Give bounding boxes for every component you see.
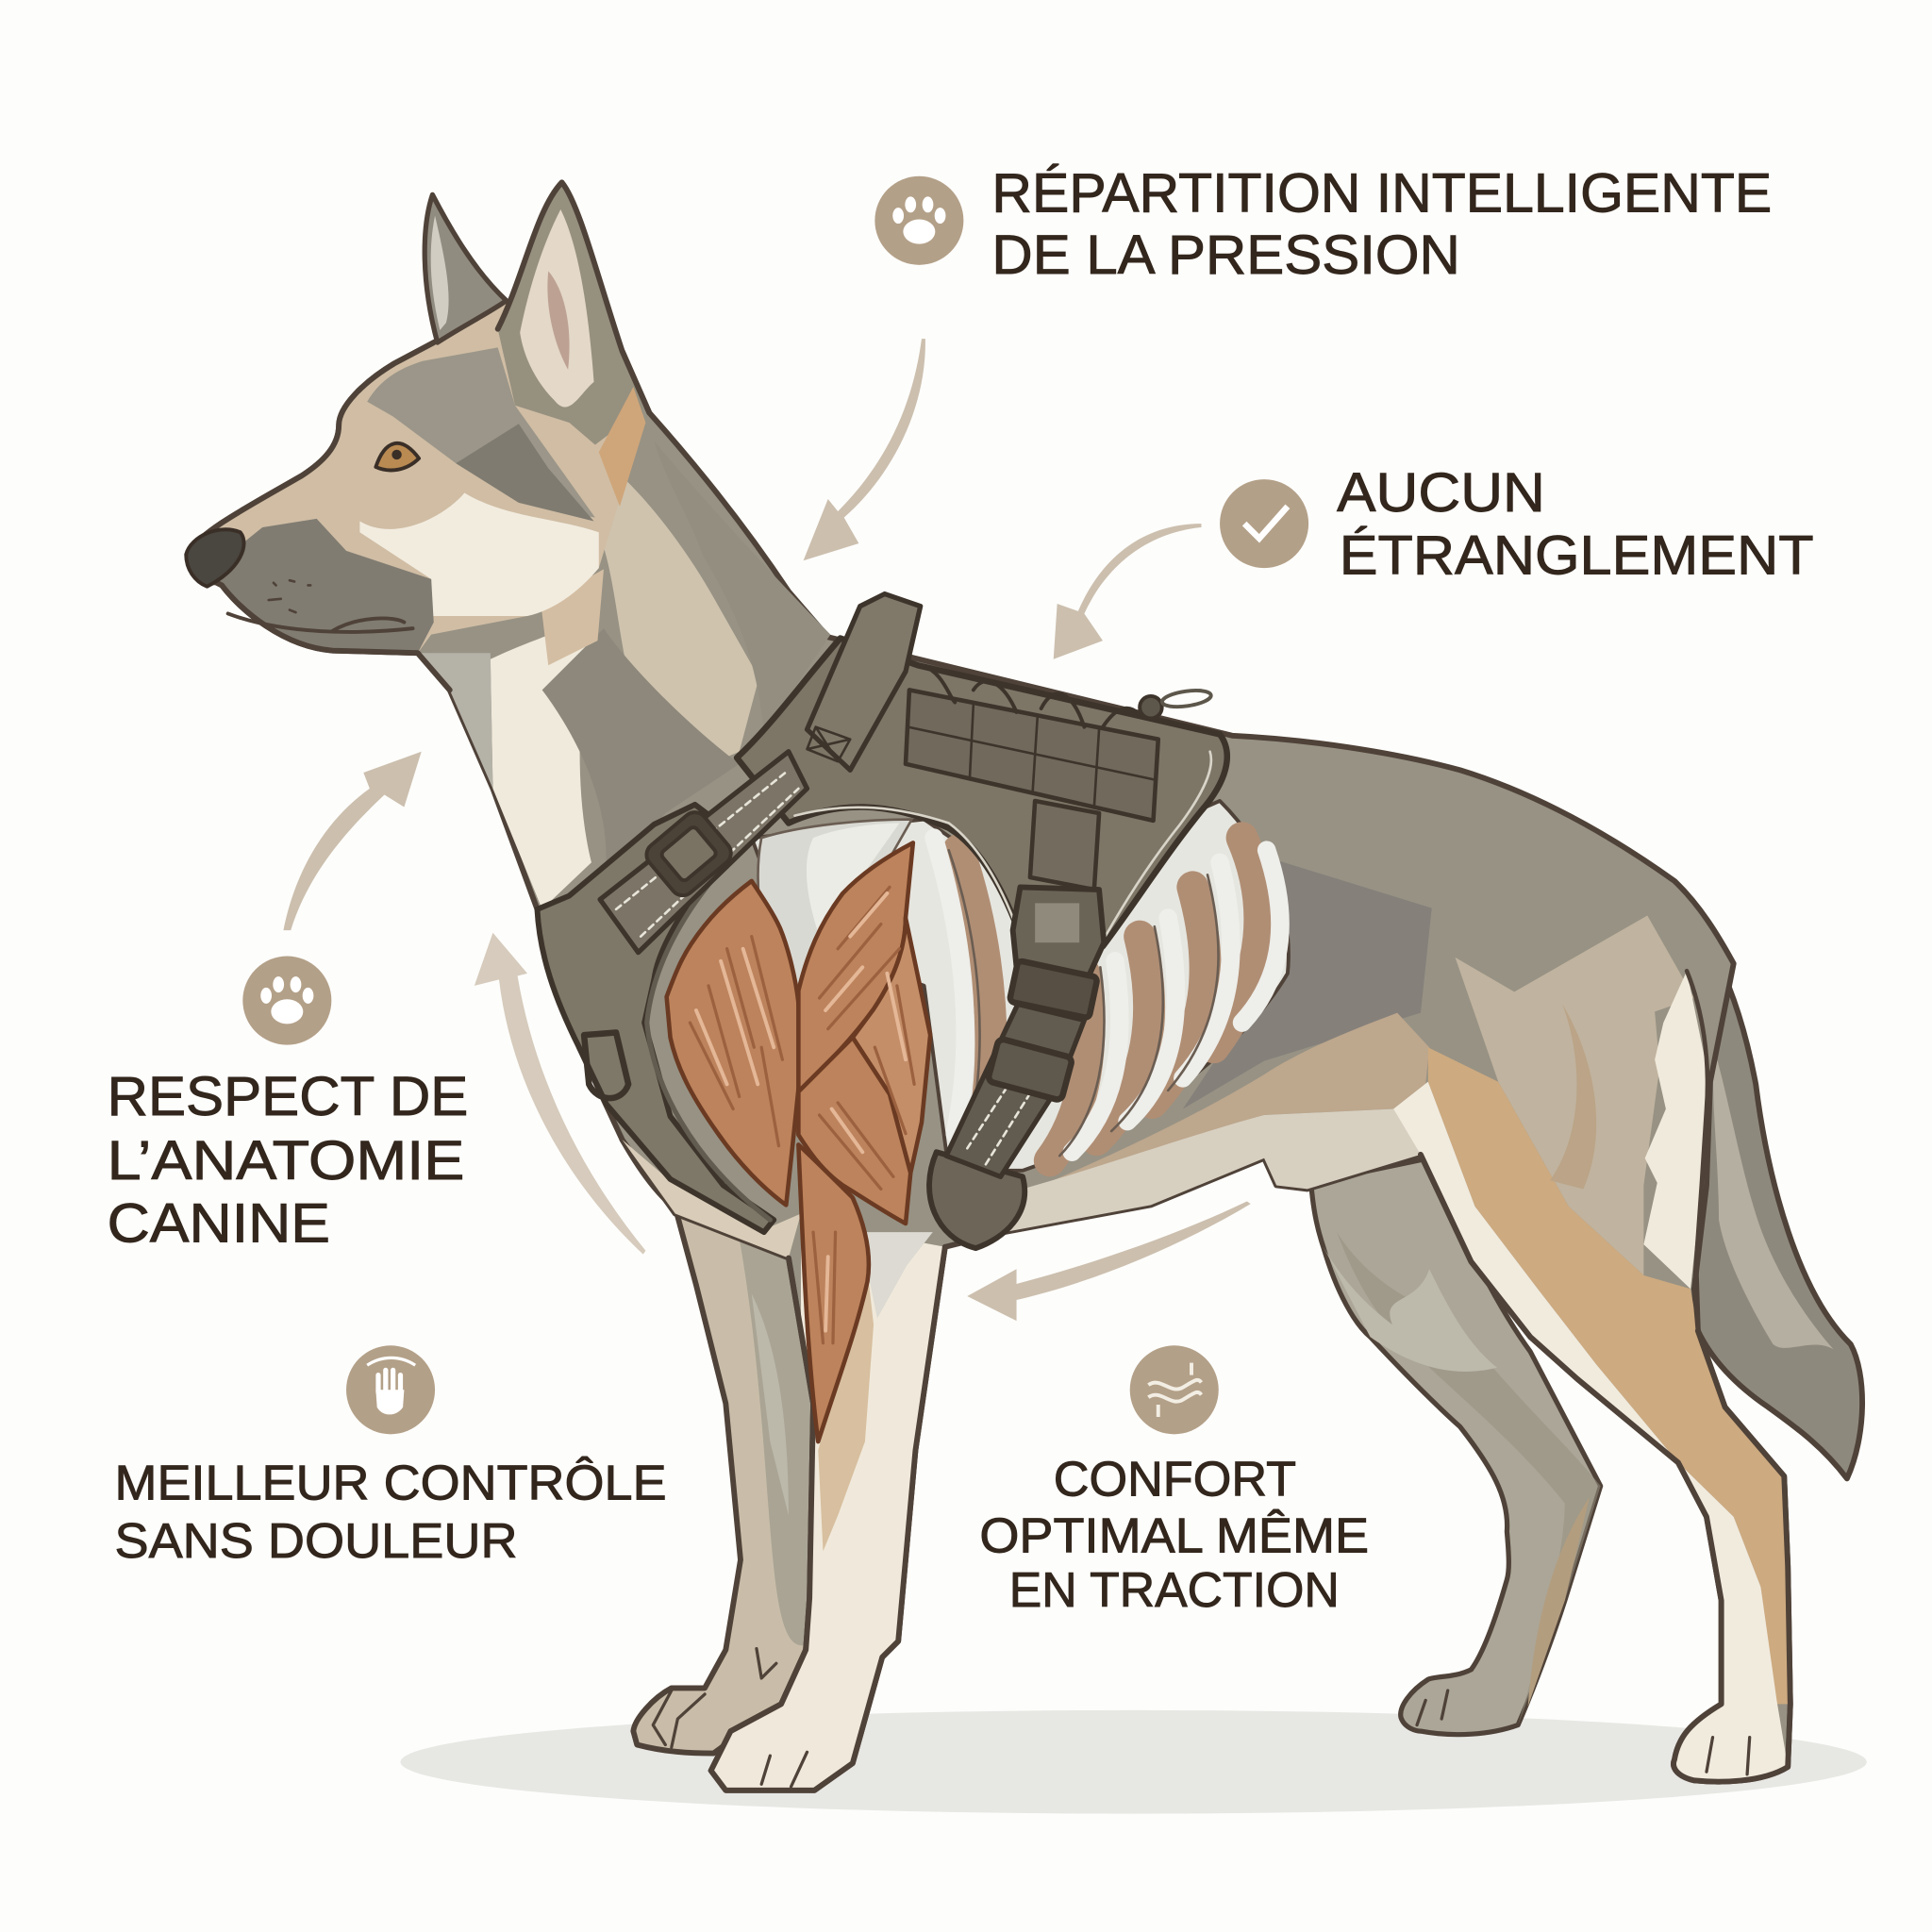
shoulder and leg muscles — [667, 842, 930, 1441]
heading: comfort: OPTIMAL MÊME — [979, 1509, 1369, 1564]
eye mask — [456, 424, 594, 521]
arrow: pressure — [804, 339, 925, 560]
grey forehead — [367, 347, 595, 518]
muscle fibres light — [696, 893, 906, 1331]
heading: anatomy — [108, 1066, 468, 1255]
heading: control — [114, 1457, 667, 1569]
white cheek — [359, 492, 599, 616]
nose — [186, 529, 244, 587]
muscle: lower — [798, 1038, 910, 1224]
neck tan spot — [541, 569, 604, 665]
harness: adjuster top — [1009, 960, 1098, 1018]
dark muzzle — [207, 519, 434, 653]
heading: anatomy: CANINE — [108, 1193, 330, 1255]
muscle: shoulder left — [667, 881, 802, 1205]
harness: clip buckle — [1013, 887, 1104, 986]
eye — [375, 443, 419, 470]
heading: pressure — [991, 163, 1772, 286]
harness: cords — [922, 665, 1140, 727]
heading: comfort — [979, 1453, 1369, 1618]
icon: paw top — [874, 176, 963, 265]
heading: anatomy: RESPECT DE — [108, 1066, 468, 1127]
muscle: forearm — [798, 1144, 869, 1441]
harness: saddle — [737, 639, 1227, 949]
heading: comfort: EN TRACTION — [1009, 1563, 1340, 1618]
neck back grey — [655, 441, 830, 733]
orange thigh — [1428, 1047, 1790, 1704]
icon: hand — [346, 1345, 435, 1434]
whisker dots — [269, 580, 310, 612]
ground shadow — [400, 1710, 1867, 1814]
near front outline — [711, 1247, 945, 1790]
harness: lower strap — [946, 1004, 1084, 1176]
head — [189, 302, 641, 653]
arrow: traction — [967, 1201, 1251, 1321]
body silhouette — [186, 182, 1790, 1790]
head outline — [189, 342, 450, 690]
harness: buckle — [641, 808, 736, 901]
tail — [1651, 869, 1862, 1478]
harness: trim lines — [794, 752, 1211, 946]
dog illustration — [186, 182, 1862, 1790]
muscle: mid — [853, 918, 930, 1173]
heading: comfort: CONFORT — [1054, 1453, 1296, 1507]
leg tan — [818, 1271, 874, 1551]
belly tan — [1047, 1013, 1429, 1183]
icon: waves — [1130, 1345, 1219, 1434]
harness: T strap — [1030, 801, 1099, 890]
chest lower — [623, 1140, 801, 1258]
shoulder grey — [542, 628, 740, 887]
neck tan — [599, 475, 759, 789]
near front leg — [711, 1146, 945, 1790]
muscle: shoulder right — [798, 842, 913, 1091]
far ear — [425, 194, 507, 342]
harness — [537, 594, 1227, 1248]
harness: chest crescent — [537, 805, 774, 1232]
chest white — [491, 616, 591, 909]
harness: d ring — [584, 1033, 628, 1098]
harness: shoulder strap — [600, 752, 808, 953]
heading: control: SANS DOULEUR — [114, 1514, 518, 1569]
neck under grey — [418, 653, 492, 789]
heading: no choking: AUCUN — [1337, 462, 1545, 524]
tail root line — [1687, 971, 1707, 1331]
torso dark patch — [1183, 850, 1432, 1109]
harness: toggle — [1140, 696, 1162, 718]
icon: paw left — [242, 957, 331, 1045]
harness: molle panel — [906, 690, 1158, 821]
arrow: no choking — [1054, 524, 1201, 659]
thigh crescent — [1550, 1004, 1596, 1189]
hindquarter light — [1456, 915, 1694, 1275]
mouth line — [228, 613, 413, 632]
rib cage — [752, 801, 1289, 1171]
heading: pressure: DE LA PRESSION — [991, 225, 1460, 286]
harness: ring — [1161, 688, 1212, 709]
heading: control: MEILLEUR CONTRÔLE — [114, 1457, 667, 1511]
cream inner hind — [1393, 1082, 1788, 1782]
heading: pressure: RÉPARTITION INTELLIGENTE — [991, 163, 1772, 225]
far front leg — [623, 1140, 813, 1754]
heading: anatomy: L’ANATOMIE — [108, 1130, 464, 1191]
far hind leg — [1311, 1158, 1601, 1735]
harness: handle — [808, 594, 921, 770]
hindquarter white — [1643, 971, 1707, 1289]
belly cream — [1004, 1082, 1428, 1232]
hind outline — [1421, 1155, 1790, 1782]
arrow: anatomy lower — [475, 933, 645, 1255]
near ear — [498, 182, 645, 445]
icon: check — [1220, 479, 1308, 568]
heading: no choking: ÉTRANGLEMENT — [1340, 525, 1814, 587]
knee — [865, 1232, 933, 1319]
harness: adjuster bottom — [988, 1039, 1073, 1101]
harness: lower pad — [929, 1152, 1024, 1248]
muscle fibres dark — [690, 887, 914, 1343]
arrow: anatomy upper — [283, 752, 422, 930]
heading: no choking — [1337, 462, 1814, 587]
